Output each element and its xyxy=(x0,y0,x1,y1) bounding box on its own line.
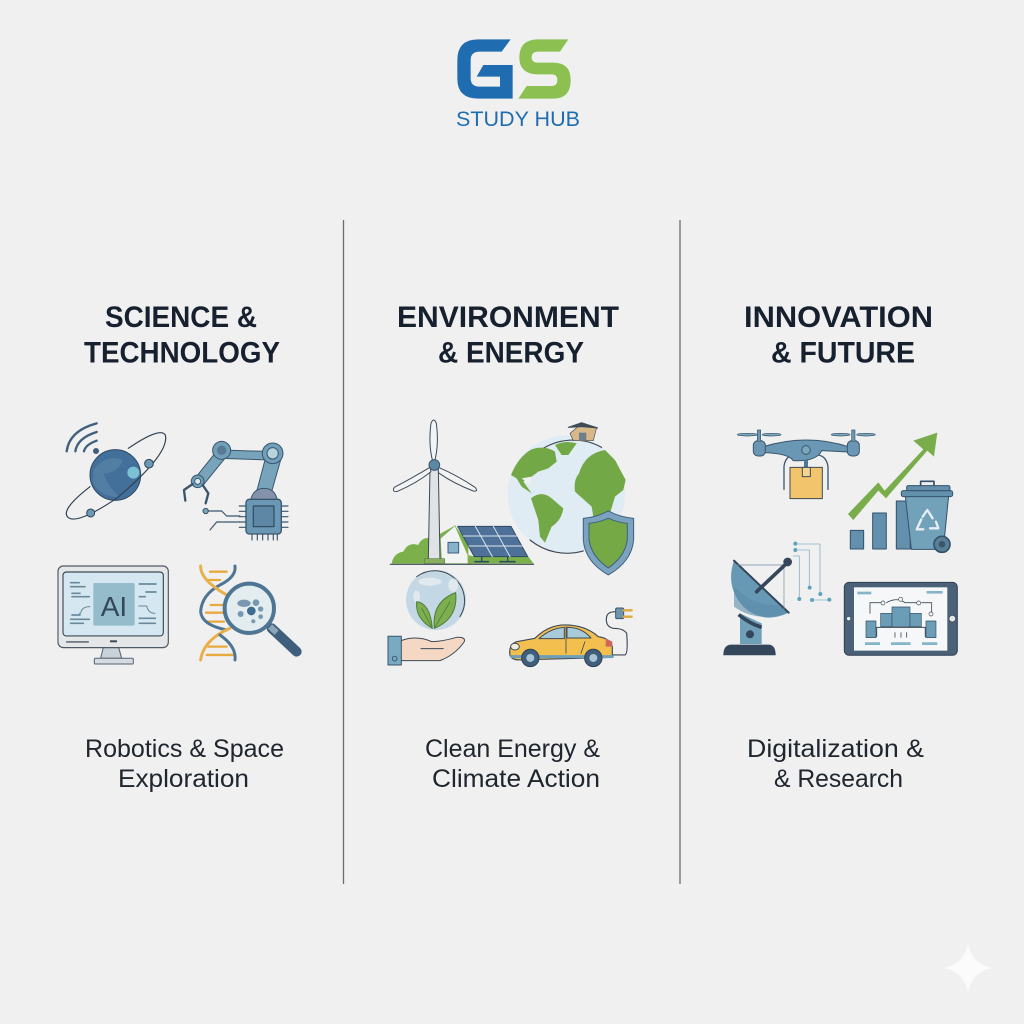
logo: GS Study Hub: STUDY HUB xyxy=(456,108,580,131)
icon: electric car xyxy=(510,608,632,667)
icon: AI monitor xyxy=(58,566,168,664)
icon: hand holding leaf and globe xyxy=(388,570,466,665)
heading: Innovation & Future: & FUTURE xyxy=(771,336,915,370)
caption: Robotics & Space Exploration: Robotics & Space xyxy=(85,735,284,763)
icon group: science and technology xyxy=(58,423,297,664)
heading: Innovation & Future xyxy=(744,301,933,370)
icon: DNA and magnifier xyxy=(201,566,297,660)
logo: GS Study Hub xyxy=(456,39,580,131)
icon group: innovation and future xyxy=(723,430,957,655)
heading: Environment & Energy xyxy=(397,301,619,370)
heading: Environment & Energy: ENVIRONMENT xyxy=(397,301,619,334)
caption: Digitalization & Research xyxy=(747,735,924,793)
heading: Environment & Energy: & ENERGY xyxy=(438,336,584,370)
icon: satellite dish with circuit lines xyxy=(723,542,831,655)
caption: Digitalization & Research: & Research xyxy=(774,765,903,793)
heading: Science & Technology: TECHNOLOGY xyxy=(84,336,280,370)
icon: orbiting planet with signal xyxy=(66,423,166,519)
caption: Robotics & Space Exploration: Exploration xyxy=(118,765,249,793)
heading: Science & Technology: SCIENCE & xyxy=(105,301,257,334)
caption: Robotics & Space Exploration xyxy=(85,735,284,793)
heading: Innovation & Future: INNOVATION xyxy=(744,301,933,334)
icon group: environment and energy xyxy=(388,420,634,667)
icon: tablet with diagram xyxy=(844,582,957,655)
icon: AI monitor: AI xyxy=(101,591,127,622)
icon: sparkle watermark xyxy=(944,944,992,992)
icon: delivery drone xyxy=(737,430,875,499)
caption: Clean Energy & Climate Action: Clean Energy & xyxy=(425,735,600,763)
icon: robot arm and chip xyxy=(184,441,288,540)
caption: Digitalization & Research: Digitalization & xyxy=(747,735,924,763)
icon: growth arrow, bars and recycling bin xyxy=(848,433,953,552)
icon: globe with house and shield xyxy=(508,423,634,575)
caption: Clean Energy & Climate Action xyxy=(425,735,600,793)
heading: Science & Technology xyxy=(84,301,280,370)
icon: wind turbine, house and solar panels xyxy=(390,420,534,564)
caption: Clean Energy & Climate Action: Climate Action xyxy=(432,765,600,793)
